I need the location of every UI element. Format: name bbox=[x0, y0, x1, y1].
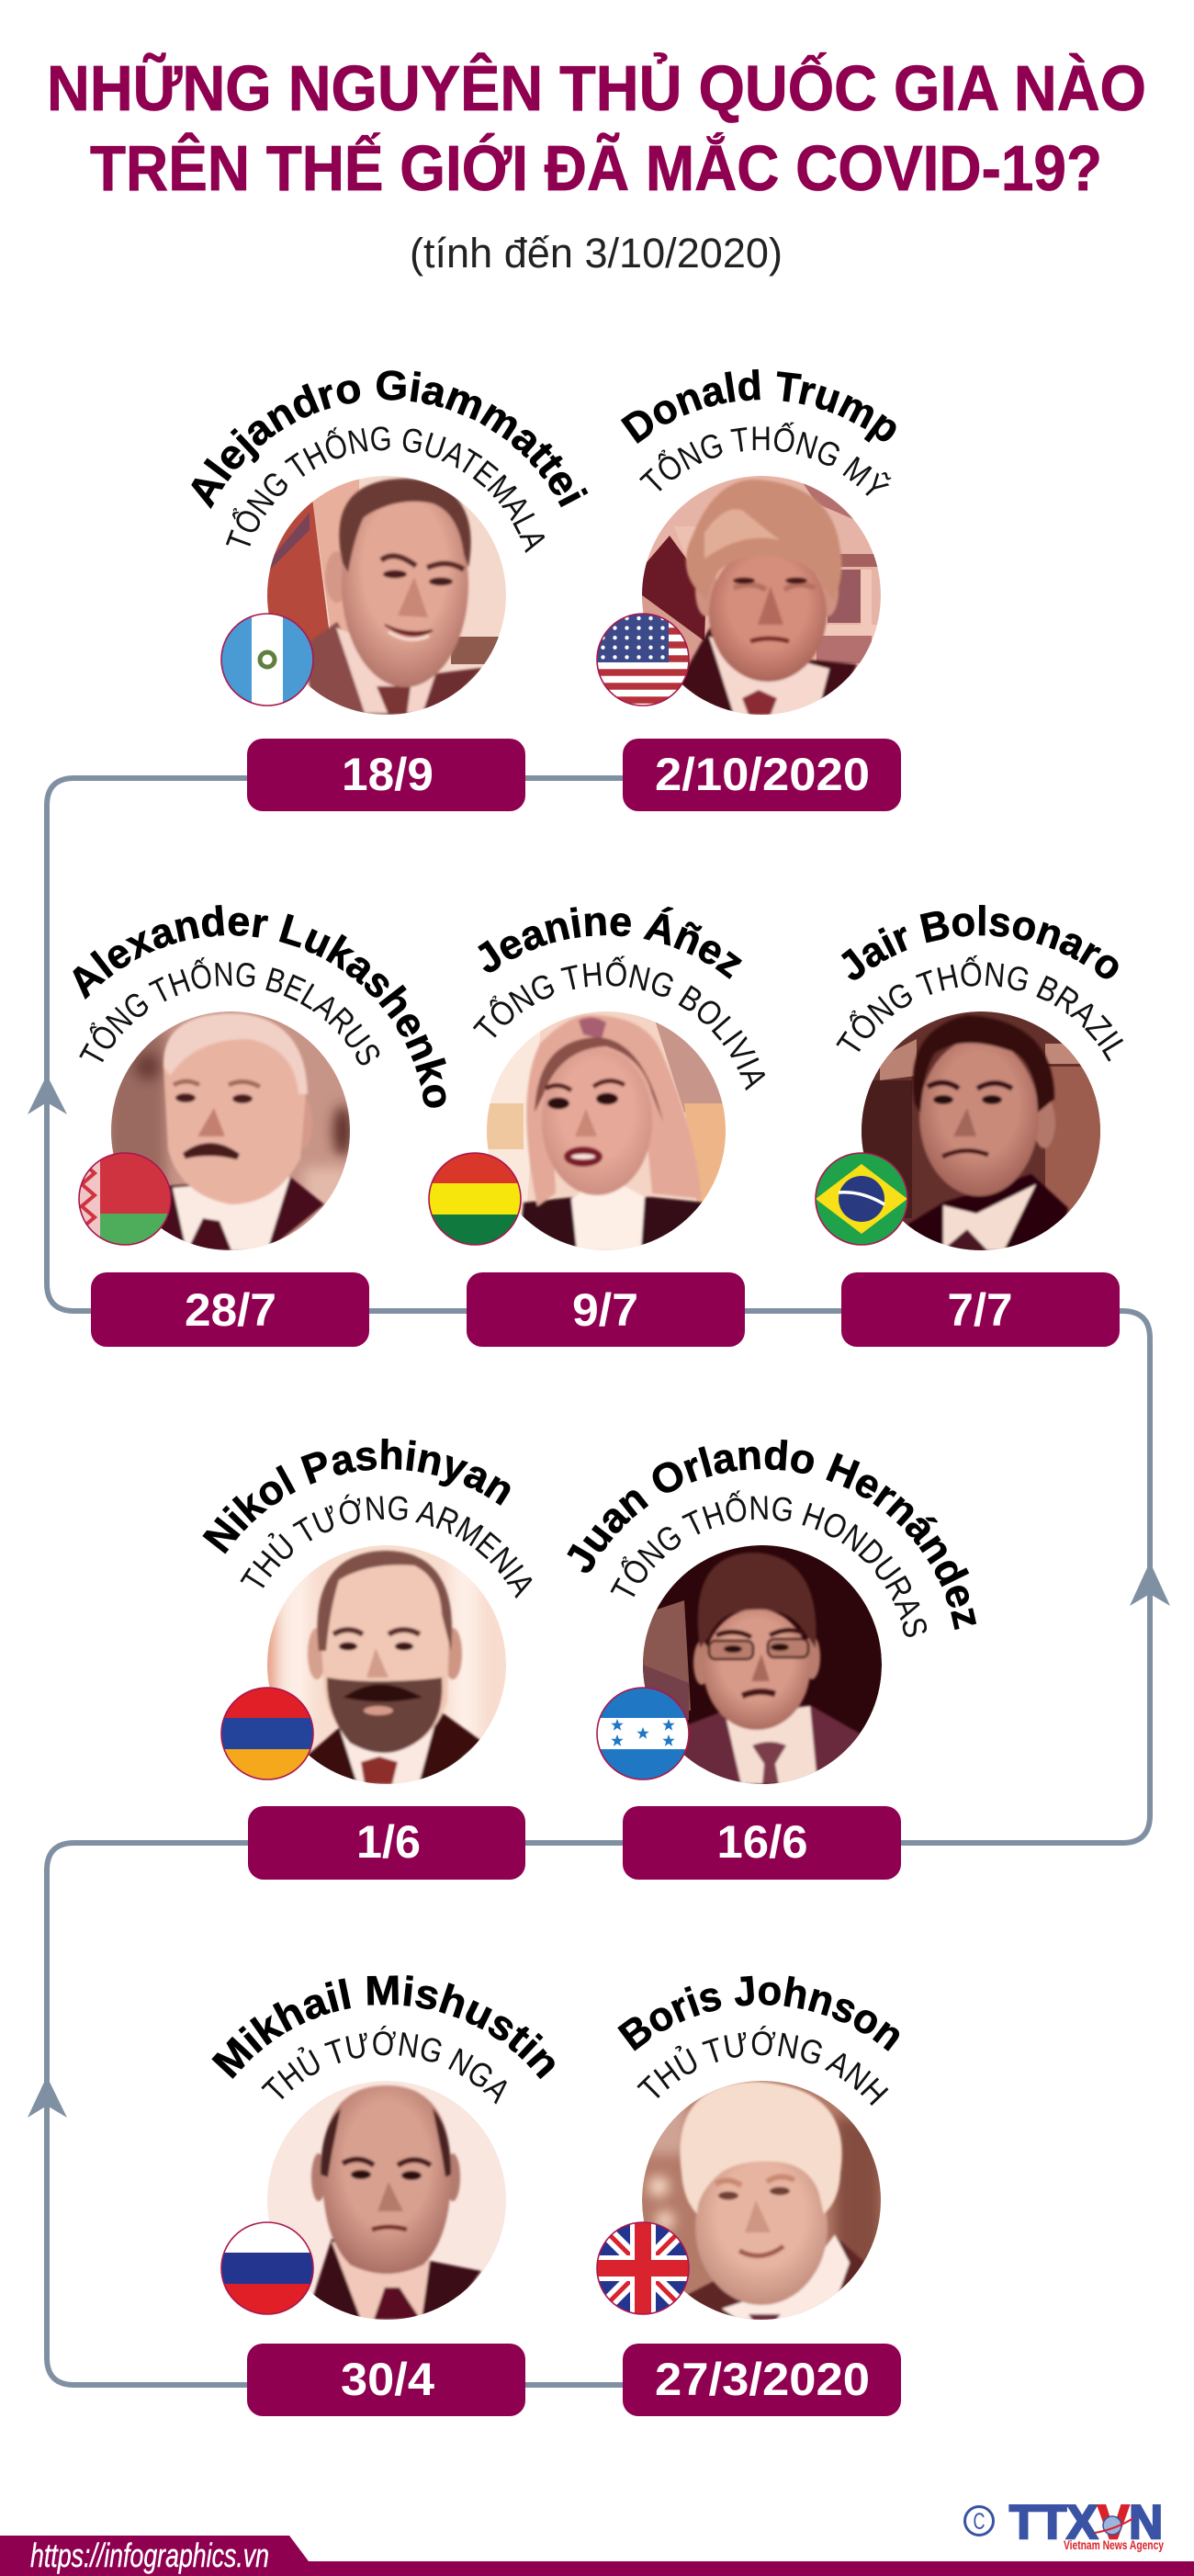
date pill: 18/9 bbox=[342, 749, 434, 800]
portrait bbox=[258, 1545, 506, 1784]
icon: copyright: C bbox=[974, 2509, 985, 2535]
name label bbox=[836, 905, 1124, 1062]
date pill: 1/6 bbox=[356, 1816, 421, 1868]
name label: TỔNG THỐNG GUATEMALA bbox=[226, 426, 546, 553]
leader: Alexander Lukashenko bbox=[73, 905, 446, 1347]
arrow: upward right row 3 bbox=[1130, 1562, 1170, 1606]
footer url: https://infographics.vn bbox=[30, 2536, 269, 2574]
portrait bbox=[642, 2081, 881, 2320]
portrait bbox=[107, 1011, 352, 1250]
leader: Juan Orlando Hernández bbox=[567, 1439, 977, 1880]
date pill: 7/7 bbox=[948, 1284, 1012, 1336]
leader: Donald Trump bbox=[596, 369, 901, 811]
flag: Honduras bbox=[597, 1688, 689, 1779]
flag: Russia bbox=[221, 2222, 313, 2315]
flag: Belarus bbox=[79, 1153, 171, 1245]
name label: Mikhail Mishustin bbox=[211, 1975, 555, 2080]
footer bar bbox=[0, 2536, 1194, 2576]
flag: United Kingdom bbox=[597, 2222, 689, 2314]
name label: THỦ TƯỚNG NGA bbox=[261, 2025, 507, 2105]
arrow: upward left row 4 bbox=[28, 2076, 67, 2118]
date pill bbox=[623, 1806, 901, 1880]
leader: Mikhail Mishustin bbox=[211, 1975, 555, 2416]
flag: Brazil bbox=[816, 1153, 907, 1245]
name label: THỦ TƯỚNG ARMENIA bbox=[240, 1494, 533, 1599]
icon: globe bbox=[1095, 2516, 1133, 2535]
name label: TỔNG THỐNG MỸ bbox=[639, 423, 892, 496]
leader: Alejandro Giammattei bbox=[191, 370, 588, 811]
name label: Nikol Pashinyan bbox=[202, 1439, 511, 1554]
name label bbox=[617, 1975, 900, 2106]
name label: TỔNG THỐNG BRAZIL bbox=[836, 955, 1124, 1062]
title bbox=[47, 51, 1146, 204]
date pill: 30/4 bbox=[341, 2354, 434, 2405]
portrait bbox=[487, 1011, 726, 1250]
name label bbox=[621, 369, 896, 496]
flag: Armenia bbox=[221, 1688, 313, 1780]
date pill bbox=[623, 2344, 901, 2416]
name label: Jair Bolsonaro bbox=[841, 905, 1119, 980]
timeline connector line bbox=[47, 778, 1150, 2385]
name label: Donald Trump bbox=[621, 369, 896, 444]
date pill: 27/3/2020 bbox=[655, 2354, 870, 2405]
date pill bbox=[247, 2344, 525, 2416]
portrait bbox=[862, 1011, 1100, 1250]
name label: TỔNG THỐNG HONDURAS bbox=[610, 1490, 927, 1637]
name label: THỦ TƯỚNG ANH bbox=[636, 2026, 889, 2106]
leader: Jair Bolsonaro bbox=[815, 905, 1124, 1347]
name label: Alejandro Giammattei bbox=[191, 370, 588, 509]
leader: Jeanine Áñez bbox=[428, 906, 766, 1347]
leader: Boris Johnson bbox=[596, 1975, 901, 2416]
date pill bbox=[91, 1272, 369, 1347]
subtitle: date note: (tính đến 3/10/2020) bbox=[410, 230, 783, 277]
date pill: 16/6 bbox=[716, 1816, 808, 1868]
date pill bbox=[248, 1806, 525, 1880]
date pill: 9/7 bbox=[572, 1284, 638, 1336]
date pill: 2/10/2020 bbox=[655, 749, 870, 800]
icon: copyright bbox=[964, 2506, 994, 2536]
name label: Jeanine Áñez bbox=[478, 906, 742, 979]
portrait bbox=[643, 1545, 882, 1784]
portrait bbox=[267, 476, 515, 715]
name label: Juan Orlando Hernández bbox=[567, 1439, 977, 1630]
name label: Boris Johnson bbox=[617, 1975, 900, 2051]
arrow: upward left row 2 bbox=[28, 1075, 67, 1114]
name label: TỔNG THỐNG BOLIVIA bbox=[472, 955, 766, 1091]
name label: TỔNG THỐNG BELARUS bbox=[79, 957, 380, 1066]
name label: Alexander Lukashenko bbox=[73, 905, 446, 1108]
date pill bbox=[841, 1272, 1120, 1347]
date pill bbox=[467, 1272, 745, 1347]
leader: Nikol Pashinyan bbox=[202, 1439, 533, 1880]
date pill: 28/7 bbox=[185, 1284, 276, 1336]
logo: TTXVN bbox=[964, 2496, 1164, 2552]
wordmark: TTXVN bbox=[1009, 2496, 1163, 2549]
portrait bbox=[642, 476, 881, 715]
date pill bbox=[623, 739, 901, 811]
date pill bbox=[247, 739, 525, 811]
portrait bbox=[267, 2081, 506, 2320]
title: TRÊN THẾ GIỚI ĐÃ MẮC COVID-19? bbox=[90, 131, 1102, 204]
flag: Guatemala bbox=[221, 614, 313, 706]
flag: Bolivia bbox=[429, 1153, 521, 1246]
flag: USA bbox=[597, 614, 689, 706]
name label bbox=[472, 906, 766, 1091]
